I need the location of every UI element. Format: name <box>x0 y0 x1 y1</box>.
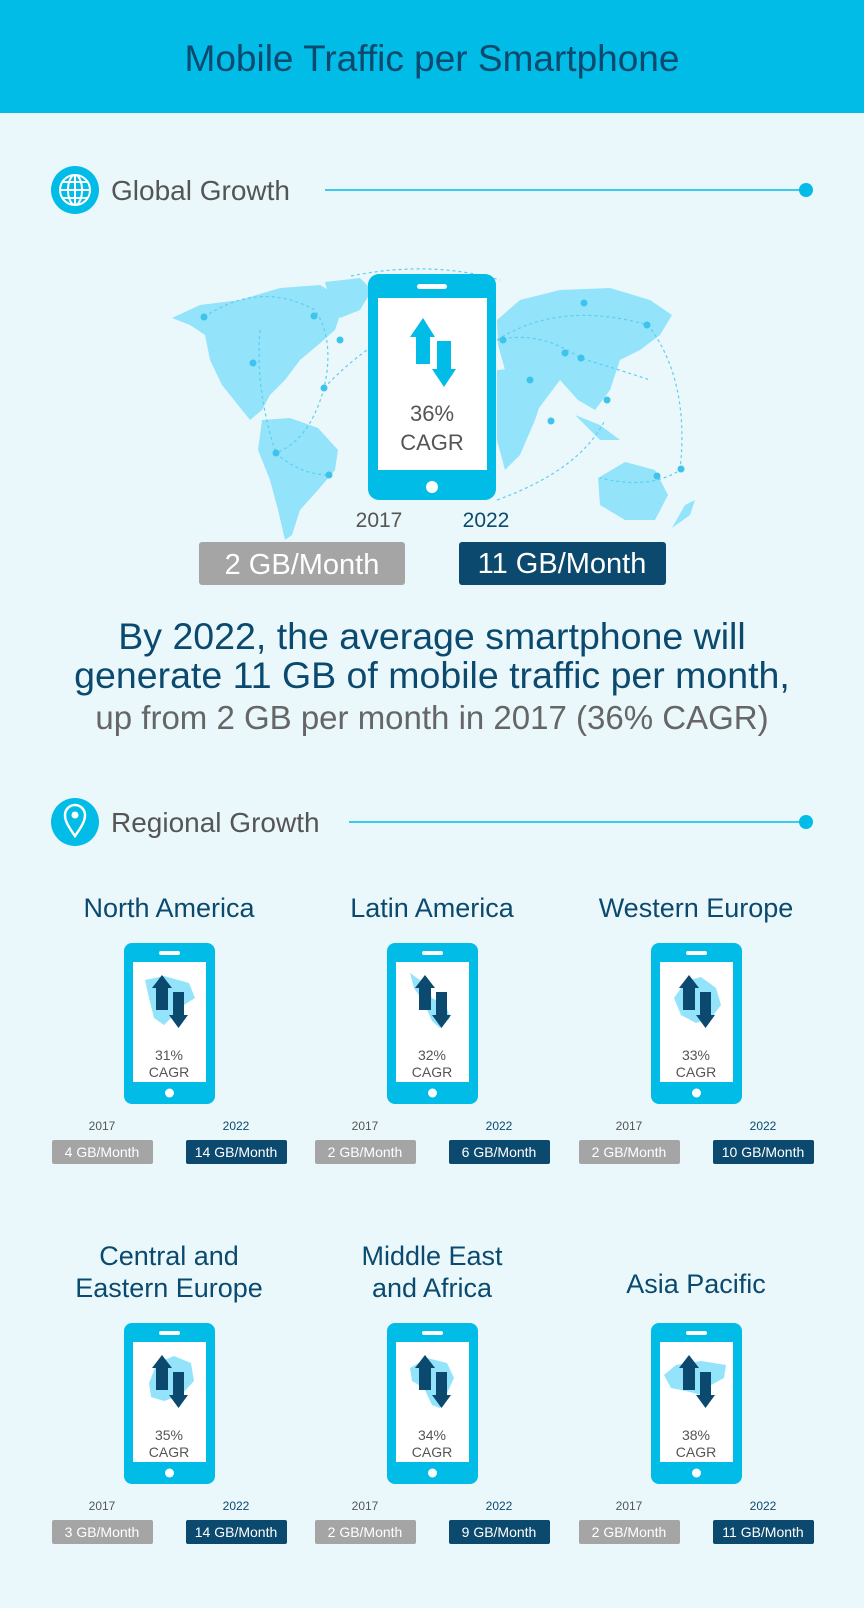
icon: location pin <box>51 798 99 846</box>
region: Latin America: CAGR <box>412 1064 452 1080</box>
region: Western Europe: 10 GB/Month <box>722 1144 804 1160</box>
global values: 2017 <box>356 509 402 532</box>
map dotted routes <box>204 269 682 500</box>
region: Western Europe: 2022 <box>750 1119 777 1133</box>
region: Central and Eastern Europe: 2017 <box>89 1499 116 1513</box>
region: Latin America: 6 GB/Month <box>462 1144 536 1160</box>
region: Western Europe: Western Europe <box>599 893 793 923</box>
region: Middle East and Africa: 34% <box>418 1427 446 1443</box>
region: North America: 31% <box>155 1047 183 1063</box>
title: Mobile Traffic per Smartphone <box>185 38 679 79</box>
region: Asia Pacific: 2 GB/Month <box>592 1524 666 1540</box>
section heading: Regional Growth: Regional Growth <box>111 807 320 838</box>
region: Middle East and Africa: 9 GB/Month <box>462 1524 536 1540</box>
region: Western Europe: 2 GB/Month <box>592 1144 666 1160</box>
region: Middle East and Africa: 2022 <box>486 1499 513 1513</box>
global phone: 36% <box>410 401 454 426</box>
icon: globe <box>51 166 99 214</box>
region: North America: 2017 <box>89 1119 116 1133</box>
region: North America: CAGR <box>149 1064 189 1080</box>
region: Middle East and Africa: CAGR <box>412 1444 452 1460</box>
region: North America <box>52 893 287 1164</box>
region: Asia Pacific: Asia Pacific <box>626 1269 766 1299</box>
header banner <box>0 0 864 113</box>
region: Middle East and Africa <box>315 1241 550 1544</box>
region: Asia Pacific: 11 GB/Month <box>722 1524 804 1540</box>
region: Western Europe: CAGR <box>676 1064 716 1080</box>
region: North America: 14 GB/Month <box>195 1144 277 1160</box>
region: Asia Pacific: 2017 <box>616 1499 643 1513</box>
region: Western Europe: 33% <box>682 1047 710 1063</box>
region: Middle East and Africa: Middle East <box>361 1241 503 1271</box>
region: North America: 4 GB/Month <box>65 1144 139 1160</box>
section heading: Regional Growth <box>51 798 813 846</box>
region: Latin America: 2017 <box>352 1119 379 1133</box>
global values: 11 GB/Month <box>478 548 646 580</box>
region: Central and Eastern Europe: Eastern Europe <box>75 1273 263 1303</box>
region: Central and Eastern Europe: 35% <box>155 1427 183 1443</box>
region: Latin America: 2022 <box>486 1119 513 1133</box>
summary text: By 2022, the average smartphone will <box>118 615 746 657</box>
summary text: up from 2 GB per month in 2017 (36% CAGR) <box>95 699 769 736</box>
region: Latin America: 2 GB/Month <box>328 1144 402 1160</box>
global values: 2 GB/Month <box>225 549 379 581</box>
region: Middle East and Africa: 2017 <box>352 1499 379 1513</box>
region: Asia Pacific: CAGR <box>676 1444 716 1460</box>
region: Central and Eastern Europe: CAGR <box>149 1444 189 1460</box>
summary text: generate 11 GB of mobile traffic per month, <box>74 654 790 696</box>
region: Asia Pacific: 2022 <box>750 1499 777 1513</box>
region: Central and Eastern Europe: Central and <box>99 1241 239 1271</box>
global values: 2022 <box>463 509 509 532</box>
region: Asia Pacific: 38% <box>682 1427 710 1443</box>
global phone <box>368 274 496 500</box>
region: Western Europe <box>579 893 814 1164</box>
region: Middle East and Africa: 2 GB/Month <box>328 1524 402 1540</box>
region: Central and Eastern Europe: 3 GB/Month <box>65 1524 139 1540</box>
region: Latin America: 32% <box>418 1047 446 1063</box>
region: Central and Eastern Europe <box>52 1241 287 1544</box>
section heading: Global Growth: Global Growth <box>111 175 290 206</box>
region: Western Europe: 2017 <box>616 1119 643 1133</box>
summary text <box>74 615 790 736</box>
region: Latin America <box>315 893 550 1164</box>
icon: up/down arrows <box>410 318 456 387</box>
section heading: Global Growth <box>51 166 813 214</box>
region: North America: 2022 <box>223 1119 250 1133</box>
global phone: CAGR <box>400 430 464 455</box>
region: North America: North America <box>83 893 256 923</box>
world map <box>172 278 695 540</box>
region: Latin America: Latin America <box>350 893 515 923</box>
region: Central and Eastern Europe: 14 GB/Month <box>195 1524 277 1540</box>
region: Middle East and Africa: and Africa <box>372 1273 493 1303</box>
global values <box>199 509 666 585</box>
region: Asia Pacific <box>579 1269 814 1544</box>
region: Central and Eastern Europe: 2022 <box>223 1499 250 1513</box>
